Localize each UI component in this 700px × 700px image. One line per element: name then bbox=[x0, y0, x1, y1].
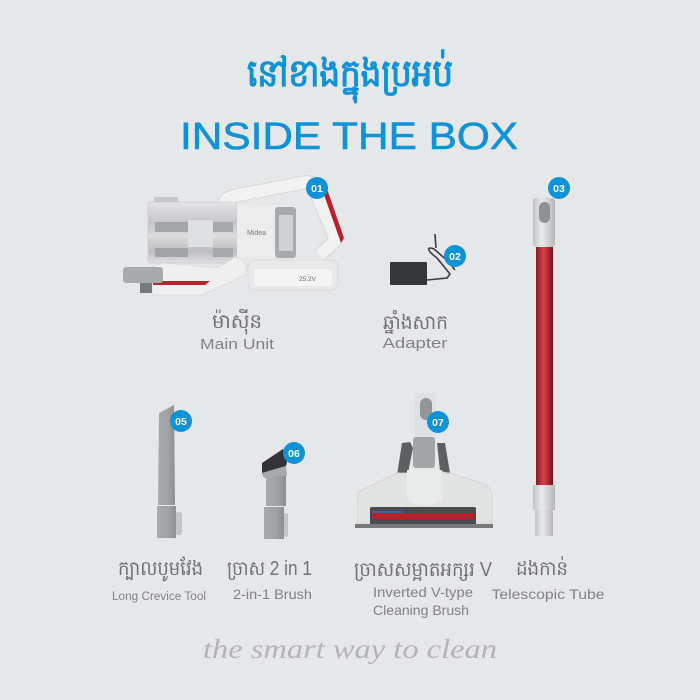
badge 06: 06 bbox=[288, 448, 300, 460]
vacuum illustration: 25.2V bbox=[299, 276, 317, 283]
badge 05 bbox=[170, 410, 192, 432]
badge 05: 05 bbox=[175, 416, 187, 428]
tagline: the smart way to clean bbox=[203, 634, 497, 664]
crevice tool illustration bbox=[157, 405, 182, 538]
adapter illustration bbox=[390, 234, 455, 285]
badge 06 bbox=[283, 442, 305, 464]
vacuum illustration bbox=[123, 182, 344, 295]
item: adapter bbox=[382, 234, 466, 352]
floor brush illustration bbox=[355, 393, 493, 528]
label: English: Adapter bbox=[382, 335, 448, 352]
item: inverted V-type brush bbox=[354, 393, 493, 618]
item: main unit bbox=[123, 177, 344, 353]
label: Khmer: ច្រាសសម្អាតអក្សរ V bbox=[354, 559, 493, 581]
badge 01 bbox=[306, 177, 328, 199]
label: English: Cleaning Brush bbox=[373, 602, 469, 618]
item: 2-in-1 brush bbox=[227, 442, 312, 602]
badge 03: 03 bbox=[553, 183, 565, 195]
label: English bbox=[373, 584, 473, 618]
item: long crevice tool bbox=[112, 405, 206, 603]
label: Khmer: ក្បាលបូមវែង bbox=[118, 556, 203, 582]
label: Khmer: ដងកាន់ bbox=[516, 555, 568, 580]
label: Khmer: ម៉ាស៊ីន bbox=[212, 308, 262, 335]
label: English: 2-in-1 Brush bbox=[233, 586, 312, 602]
label: English: Telescopic Tube bbox=[492, 586, 605, 602]
badge 03 bbox=[548, 177, 570, 199]
badge 01: 01 bbox=[311, 183, 323, 195]
English heading: INSIDE THE BOX bbox=[180, 116, 518, 158]
label: English: Main Unit bbox=[200, 336, 275, 353]
brush illustration bbox=[262, 449, 288, 539]
Khmer heading: នៅខាងក្នុងប្រអប់ bbox=[247, 49, 453, 104]
vacuum illustration: Midea bbox=[247, 230, 266, 237]
label: Khmer: ច្រាស 2 in 1 bbox=[227, 558, 312, 580]
label: English: Inverted V-type bbox=[373, 584, 473, 600]
badge 07: 07 bbox=[432, 417, 444, 429]
badge 07 bbox=[427, 411, 449, 433]
badge 02: 02 bbox=[449, 251, 461, 263]
label: Khmer: ឆ្នាំងសាក bbox=[383, 309, 448, 334]
item: telescopic tube bbox=[492, 177, 605, 602]
title bbox=[180, 49, 518, 158]
tube illustration bbox=[533, 198, 555, 536]
label: English: Long Crevice Tool bbox=[112, 591, 206, 603]
